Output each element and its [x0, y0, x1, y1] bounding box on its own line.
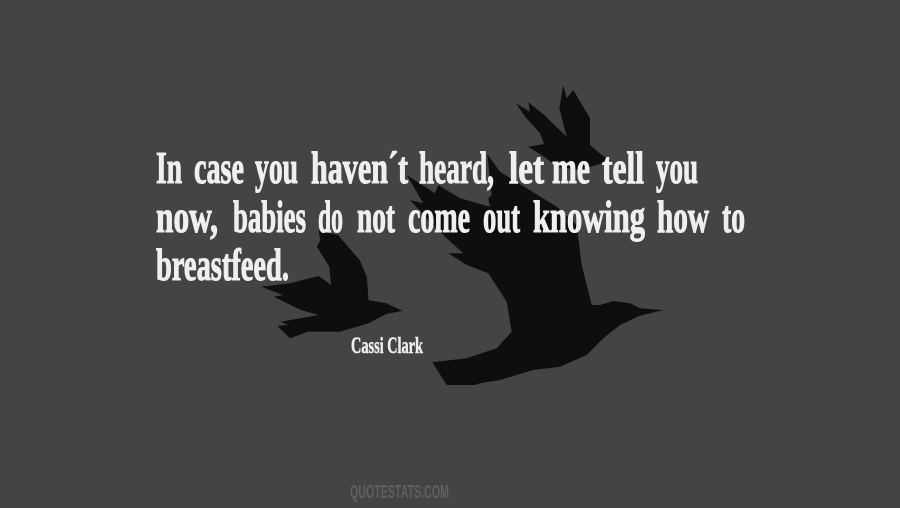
quote text: babies	[233, 191, 306, 242]
quote text: case	[194, 142, 244, 193]
quote text: breastfeed.	[156, 239, 289, 290]
quote text: now,	[156, 191, 218, 242]
quote text: knowing	[533, 191, 645, 242]
attribution: author name: Cassi Clark	[351, 333, 423, 358]
quote text: not	[357, 191, 395, 242]
quote text: tell	[602, 142, 644, 193]
quote text: me	[552, 142, 590, 193]
icon: top small bird silhouette	[516, 85, 613, 170]
watermark: site name: QUOTESTATS.COM	[350, 482, 449, 502]
quote text: In	[156, 142, 182, 193]
quote text: to	[722, 191, 745, 242]
quote text: you	[656, 142, 698, 193]
quote text	[156, 142, 745, 290]
quote text: come	[408, 191, 470, 242]
quote text: let	[509, 142, 544, 193]
quote text: how	[657, 191, 709, 242]
quote text: out	[483, 191, 520, 242]
quote text: haven´t	[311, 142, 408, 193]
quote text: do	[318, 191, 343, 242]
icon: large bird silhouette	[407, 154, 663, 385]
icon: left bird silhouette	[261, 230, 402, 338]
quote text: heard,	[419, 142, 494, 193]
quote text: you	[255, 142, 298, 193]
